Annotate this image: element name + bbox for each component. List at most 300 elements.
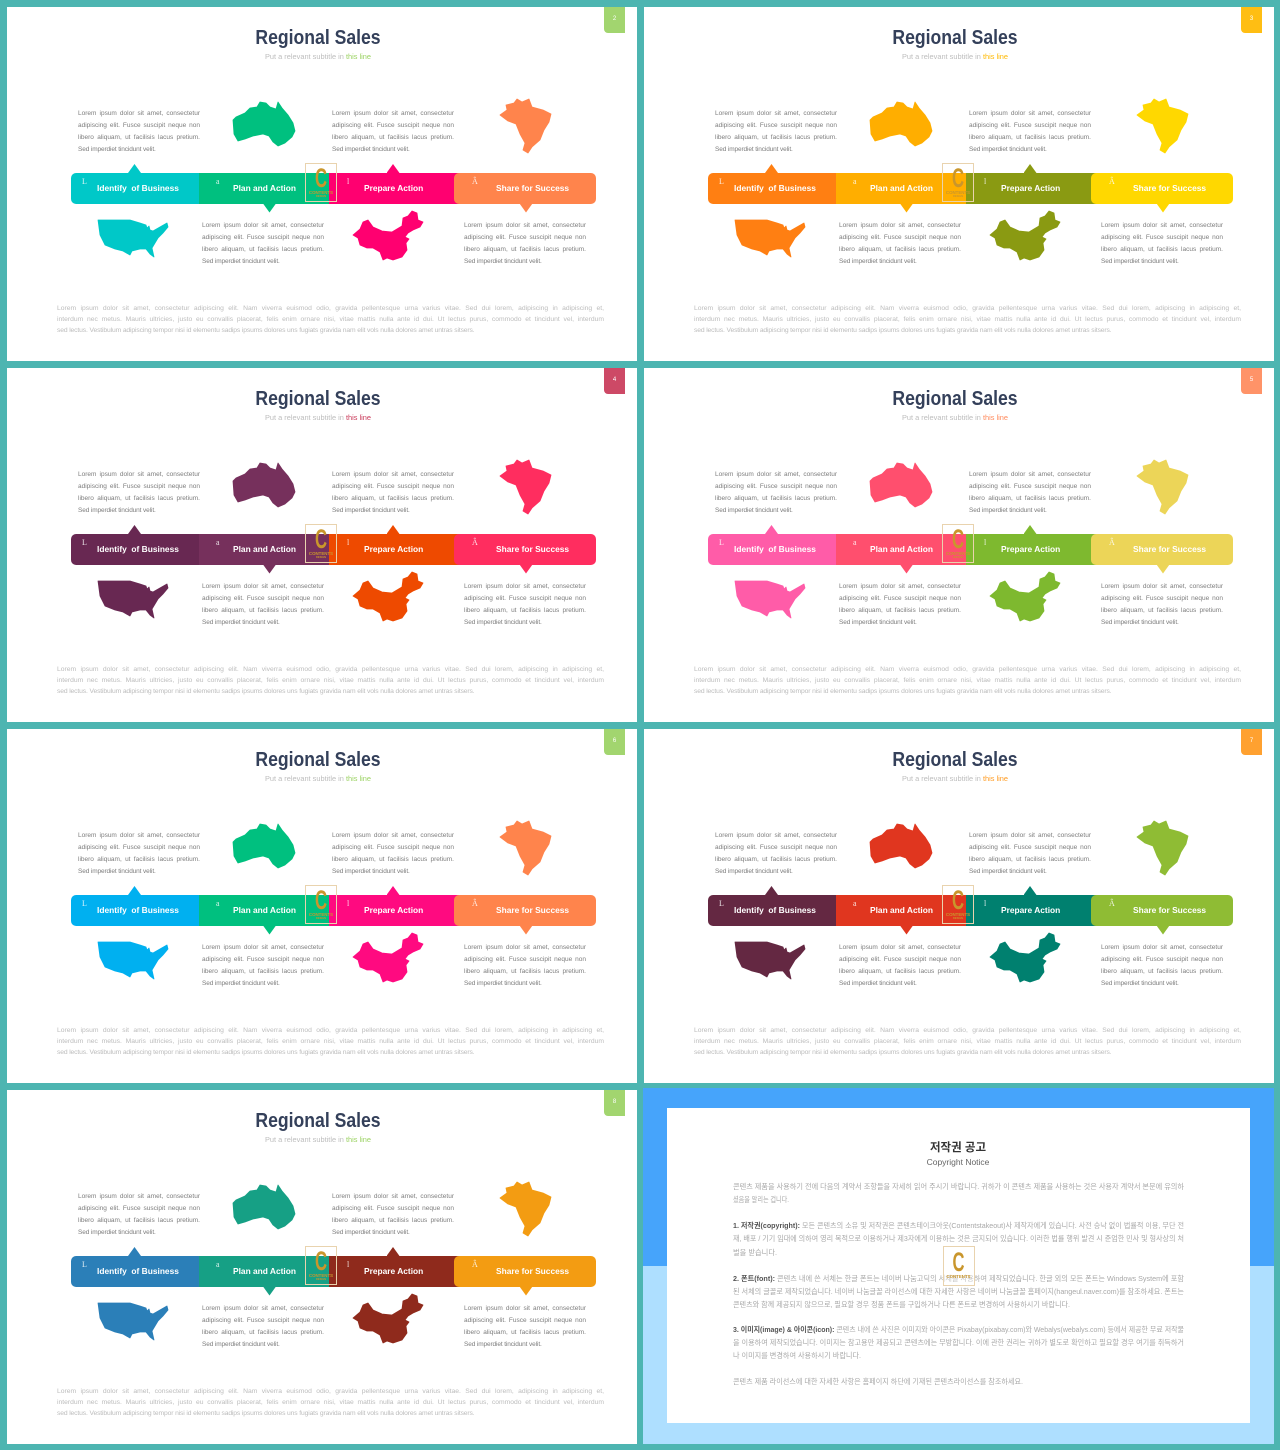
text block: top right xyxy=(969,110,1091,153)
step: Share for Success: Â xyxy=(1109,898,1115,908)
text block: bottom right: libero aliquam, ut facilisis lacus pretium. xyxy=(1101,246,1223,253)
text block: bottom left: Sed imperdiet tincidunt velit. xyxy=(202,619,280,626)
step: Plan and Action xyxy=(836,894,966,926)
text block: top left: Sed imperdiet tincidunt velit. xyxy=(715,868,793,875)
text block: top right: Lorem ipsum dolor sit amet, consectetur xyxy=(332,471,454,478)
text block: bottom left xyxy=(839,942,961,990)
text block: top right: libero aliquam, ut facilisis lacus pretium. xyxy=(969,856,1091,863)
text block: top right: libero aliquam, ut facilisis lacus pretium. xyxy=(969,495,1091,502)
step: Plan and Action: Plan and Action xyxy=(870,182,933,192)
text block: top right: adipiscing elit. Fusce suscipit neque non xyxy=(332,1205,454,1212)
logo: C xyxy=(315,163,327,193)
subtitle: Put a relevant subtitle in this line xyxy=(265,52,371,61)
icon: China map xyxy=(353,1294,423,1343)
text block: top left: Sed imperdiet tincidunt velit. xyxy=(78,1229,156,1236)
footer paragraph: Lorem ipsum dolor sit amet, consectetur adipiscing elit. Nam viverra euismod odio, gravida pellentesque urna varius vitae. Sed dui lorem, adipiscing in adipiscing et, xyxy=(57,1027,604,1034)
text block: bottom left: adipiscing elit. Fusce suscipit neque non xyxy=(202,234,324,241)
logo: CONTENTS xyxy=(309,190,333,194)
icon: Brazil map xyxy=(1136,460,1188,514)
logo: C xyxy=(952,524,964,554)
text block: top right: Lorem ipsum dolor sit amet, consectetur xyxy=(332,110,454,117)
text block: top left xyxy=(715,830,837,878)
text block: top right: Sed imperdiet tincidunt velit. xyxy=(332,507,410,514)
step: Prepare Action: l xyxy=(347,898,349,908)
footer paragraph: sed lectus. Vestibulum adipiscing tempor nisi id elementu sadips ipsums dolores uns fugiats gravida nam elit vols nulla dolores amet untras sitsers. xyxy=(57,1049,474,1056)
logo xyxy=(305,1246,337,1285)
text block: bottom right: Sed imperdiet tincidunt velit. xyxy=(1101,258,1179,265)
text block: top left xyxy=(715,110,837,153)
text block: bottom right xyxy=(464,1303,586,1351)
text block: bottom left: Lorem ipsum dolor sit amet, consectetur xyxy=(202,1305,324,1312)
text block: bottom right: Sed imperdiet tincidunt velit. xyxy=(464,980,542,987)
footer paragraph: interdum nec metus. Mauris ultricies, justo eu convallis placerat, felis enim ornare nisi, vitae mattis nulla ante id dui. Ut lectus purus, commodo et tincidunt vel, interdum xyxy=(57,677,604,684)
footer paragraph: interdum nec metus. Mauris ultricies, justo eu convallis placerat, felis enim ornare nisi, vitae mattis nulla ante id dui. Ut lectus purus, commodo et tincidunt vel, interdum xyxy=(57,1399,604,1406)
logo: DESIGN xyxy=(316,556,326,559)
step: Plan and Action: Plan and Action xyxy=(870,544,933,554)
icon: China map xyxy=(353,933,423,982)
step: Prepare Action xyxy=(329,172,459,204)
text block: top right: libero aliquam, ut facilisis lacus pretium. xyxy=(332,495,454,502)
text block: top left: libero aliquam, ut facilisis lacus pretium. xyxy=(78,1217,200,1224)
page number tab xyxy=(1241,7,1262,33)
step: Identify of Business xyxy=(71,172,199,204)
step: Identify of Business: Identify of Business xyxy=(734,544,816,554)
notice section 1 copyright: 1. 저작권(copyright): 모든 콘텐츠의 소유 및 저작권은 콘텐츠테이크아웃(Contentstakeout)사 제작자에게 있습니다. 사전 승낙 없이 법률적 이용, 무단 전 xyxy=(733,1221,1184,1230)
text block: top right: Lorem ipsum dolor sit amet, consectetur xyxy=(332,832,454,839)
text block: bottom left: Sed imperdiet tincidunt velit. xyxy=(202,258,280,265)
logo: DESIGN xyxy=(316,1278,326,1281)
step: Prepare Action xyxy=(966,894,1096,926)
step: Share for Success: Share for Success xyxy=(496,182,569,192)
text block: bottom left: libero aliquam, ut facilisis lacus pretium. xyxy=(839,968,961,975)
text block: top left: Sed imperdiet tincidunt velit. xyxy=(715,146,793,153)
step: Prepare Action: Prepare Action xyxy=(364,904,423,914)
step: Share for Success: Â xyxy=(1109,176,1115,186)
footer paragraph: Lorem ipsum dolor sit amet, consectetur adipiscing elit. Nam viverra euismod odio, gravida pellentesque urna varius vitae. Sed dui lorem, adipiscing in adipiscing et, xyxy=(57,666,604,673)
step: Prepare Action: l xyxy=(984,176,986,186)
panel: slide 5 pink coral green yellow xyxy=(644,368,1274,722)
text block: top left: Lorem ipsum dolor sit amet, consectetur xyxy=(78,471,200,478)
text block: top right: adipiscing elit. Fusce suscipit neque non xyxy=(332,844,454,851)
step: Plan and Action: Plan and Action xyxy=(233,904,296,914)
text block: bottom right: Lorem ipsum dolor sit amet, consectetur xyxy=(1101,222,1223,229)
text block: bottom right: Lorem ipsum dolor sit amet, consectetur xyxy=(464,583,586,590)
step: Share for Success: Share for Success xyxy=(1133,904,1206,914)
text block: top left: libero aliquam, ut facilisis lacus pretium. xyxy=(78,134,200,141)
text block: bottom right: Lorem ipsum dolor sit amet, consectetur xyxy=(464,944,586,951)
text block: bottom left: libero aliquam, ut facilisis lacus pretium. xyxy=(202,246,324,253)
footer paragraph: Lorem ipsum dolor sit amet, consectetur adipiscing elit. Nam viverra euismod odio, gravida pellentesque urna varius vitae. Sed dui lorem, adipiscing in adipiscing et, xyxy=(694,305,1241,312)
text block: top right: Lorem ipsum dolor sit amet, consectetur xyxy=(969,110,1091,117)
step: Plan and Action: Plan and Action xyxy=(870,904,933,914)
text block: bottom left xyxy=(202,583,324,626)
notice intro: 셨음을 알리는 겁니다. xyxy=(733,1195,789,1204)
text block: bottom left: libero aliquam, ut facilisis lacus pretium. xyxy=(839,607,961,614)
notice section 3 image and icon: 나 이미지를 변경하여 사용하시기 바랍니다. xyxy=(733,1351,861,1360)
logo: CONTENTS xyxy=(946,1274,971,1279)
text block: bottom left: Lorem ipsum dolor sit amet, consectetur xyxy=(839,583,961,590)
notice intro: 콘텐츠 제품을 사용하기 전에 다음의 계약서 조항들을 자세히 읽어 주시기 바랍니다. 귀하가 이 콘텐츠 제품을 사용하는 것은 사용자 계약서 본문에 유의하 xyxy=(733,1182,1184,1191)
footer paragraph xyxy=(694,666,1241,695)
text block: top left: libero aliquam, ut facilisis lacus pretium. xyxy=(78,856,200,863)
text block: bottom right xyxy=(1101,583,1223,626)
text block: top left: adipiscing elit. Fusce suscipit neque non xyxy=(78,1205,200,1212)
step: Share for Success: Â xyxy=(472,538,478,546)
text block: top right: libero aliquam, ut facilisis lacus pretium. xyxy=(332,1217,454,1224)
page number tab: 4 xyxy=(613,377,616,383)
subtitle: Put a relevant subtitle in this line xyxy=(902,52,1008,61)
icon: Australia map xyxy=(870,462,932,508)
step: Identify of Business xyxy=(71,534,199,565)
text block: bottom left: Lorem ipsum dolor sit amet, consectetur xyxy=(202,944,324,951)
text block: top left: adipiscing elit. Fusce suscipit neque non xyxy=(715,483,837,490)
text block: bottom right: libero aliquam, ut facilisis lacus pretium. xyxy=(464,246,586,253)
text block: top left: Lorem ipsum dolor sit amet, consectetur xyxy=(78,110,200,117)
notice section 3 image and icon xyxy=(733,1325,1184,1360)
step: Plan and Action: Plan and Action xyxy=(233,544,296,554)
text block: top left xyxy=(715,471,837,514)
icon: China map xyxy=(990,210,1060,260)
text block: top right: Lorem ipsum dolor sit amet, consectetur xyxy=(332,1193,454,1200)
page number tab xyxy=(1241,729,1262,755)
icon: USA map xyxy=(734,220,806,258)
text block: top left xyxy=(78,471,200,514)
text block: bottom right xyxy=(464,942,586,990)
logo xyxy=(305,885,337,924)
step: Identify of Business: L xyxy=(82,898,87,908)
step: Prepare Action xyxy=(329,1256,459,1287)
heading: Regional Sales xyxy=(892,749,1018,771)
step: Plan and Action xyxy=(836,534,966,565)
text block: bottom right: adipiscing elit. Fusce suscipit neque non xyxy=(464,956,586,963)
text block: top left: Lorem ipsum dolor sit amet, consectetur xyxy=(78,832,200,839)
step: Prepare Action: Prepare Action xyxy=(364,1266,423,1276)
logo: DESIGN xyxy=(953,195,963,198)
text block: top right xyxy=(332,1191,454,1239)
footer paragraph: sed lectus. Vestibulum adipiscing tempor nisi id elementu sadips ipsums dolores uns fugiats gravida nam elit vols nulla dolores amet untras sitsers. xyxy=(694,327,1112,334)
step: Plan and Action: a xyxy=(216,176,220,186)
notice section 1 copyright xyxy=(733,1221,1184,1257)
logo xyxy=(305,163,337,202)
page number tab: 6 xyxy=(613,738,616,744)
heading: Regional Sales xyxy=(255,27,381,49)
text block: bottom right: libero aliquam, ut facilisis lacus pretium. xyxy=(464,1329,586,1336)
text block: bottom right: adipiscing elit. Fusce suscipit neque non xyxy=(464,234,586,241)
footer paragraph: Lorem ipsum dolor sit amet, consectetur adipiscing elit. Nam viverra euismod odio, gravida pellentesque urna varius vitae. Sed dui lorem, adipiscing in adipiscing et, xyxy=(694,1027,1241,1034)
text block: top right: adipiscing elit. Fusce suscipit neque non xyxy=(969,122,1091,129)
text block: bottom right: Sed imperdiet tincidunt velit. xyxy=(464,619,542,626)
step: Identify of Business: L xyxy=(719,898,724,908)
step: Plan and Action xyxy=(199,534,329,565)
subtitle: Put a relevant subtitle in this line xyxy=(265,774,371,783)
icon: USA map xyxy=(98,580,168,618)
footer paragraph xyxy=(57,305,604,334)
text block: top left: adipiscing elit. Fusce suscipit neque non xyxy=(715,844,837,851)
text block: top right xyxy=(332,471,454,514)
logo: C xyxy=(952,163,964,193)
notice heading: 저작권 공고 xyxy=(930,1140,986,1154)
step: Share for Success xyxy=(1091,172,1233,204)
icon: China map xyxy=(990,572,1060,622)
text block: bottom left: Lorem ipsum dolor sit amet, consectetur xyxy=(202,583,324,590)
logo: CONTENTS xyxy=(309,550,333,556)
step: Identify of Business: Identify of Business xyxy=(97,1266,179,1276)
icon: Australia map xyxy=(232,102,296,146)
notice section 3 image and icon: 3. 이미지(image) & 아이콘(icon): 콘텐츠 내에 쓴 사진은 이미지와 아이콘은 Pixabay(pixabay.com)와 Webalys(webalys.com) 등에서 제공한 무료 저작물 xyxy=(733,1325,1184,1334)
text block: bottom left: adipiscing elit. Fusce suscipit neque non xyxy=(839,956,961,963)
notice closing line: 콘텐츠 제품 라이선스에 대한 자세한 사항은 홈페이지 하단에 기재된 콘텐츠라이선스를 참조하세요. xyxy=(733,1377,1023,1386)
step: Share for Success: Share for Success xyxy=(1133,544,1206,554)
icon: USA map xyxy=(735,941,805,979)
text block: bottom right: libero aliquam, ut facilisis lacus pretium. xyxy=(464,968,586,975)
heading: Regional Sales xyxy=(255,749,381,771)
icon: Brazil map xyxy=(500,460,552,514)
text block: bottom left: adipiscing elit. Fusce suscipit neque non xyxy=(202,595,324,602)
text block: bottom right: libero aliquam, ut facilisis lacus pretium. xyxy=(464,607,586,614)
step: Identify of Business: L xyxy=(82,176,87,186)
step: Plan and Action: Plan and Action xyxy=(233,182,296,192)
text block: bottom right: Lorem ipsum dolor sit amet, consectetur xyxy=(1101,583,1223,590)
text block: bottom left xyxy=(202,222,324,265)
subtitle: Put a relevant subtitle in this line xyxy=(265,1135,371,1144)
step: Prepare Action xyxy=(966,534,1096,565)
text block: top right xyxy=(332,830,454,878)
text block: top right: adipiscing elit. Fusce suscipit neque non xyxy=(969,483,1091,490)
text block: top left: Lorem ipsum dolor sit amet, consectetur xyxy=(715,832,837,839)
step: Share for Success: Â xyxy=(1109,538,1115,546)
text block: top left: Lorem ipsum dolor sit amet, consectetur xyxy=(78,1193,200,1200)
text block: top left: Lorem ipsum dolor sit amet, consectetur xyxy=(715,110,837,117)
panel: slide 3 orange amber olive yellow xyxy=(644,7,1274,361)
text block: bottom left: Lorem ipsum dolor sit amet, consectetur xyxy=(202,222,324,229)
footer paragraph: sed lectus. Vestibulum adipiscing tempor nisi id elementu sadips ipsums dolores uns fugiats gravida nam elit vols nulla dolores amet untras sitsers. xyxy=(57,327,474,334)
logo xyxy=(942,163,974,202)
footer paragraph: interdum nec metus. Mauris ultricies, justo eu convallis placerat, felis enim ornare nisi, vitae mattis nulla ante id dui. Ut lectus purus, commodo et tincidunt vel, interdum xyxy=(694,316,1241,323)
step: Prepare Action xyxy=(329,894,459,926)
heading: Regional Sales xyxy=(255,388,381,410)
logo xyxy=(305,524,337,563)
step: Plan and Action: a xyxy=(853,538,857,546)
step: Identify of Business: Identify of Business xyxy=(97,544,179,554)
step: Prepare Action: l xyxy=(984,538,986,546)
step: Prepare Action xyxy=(966,172,1096,204)
step: Prepare Action: Prepare Action xyxy=(1001,904,1060,914)
panel: slide 8 blue teal brown amber xyxy=(7,1090,637,1444)
text block: bottom left: Sed imperdiet tincidunt velit. xyxy=(839,619,917,626)
logo: DESIGN xyxy=(316,195,326,198)
text block: bottom right: adipiscing elit. Fusce suscipit neque non xyxy=(1101,956,1223,963)
step: Prepare Action: Prepare Action xyxy=(364,544,423,554)
text block: top left: Sed imperdiet tincidunt velit. xyxy=(715,507,793,514)
notice section 2 font: 된 서체의 글꼴로 제작되었습니다. 네이버 나눔글꼴 라이선스에 대한 자세한 사항은 네이버 나눔글꼴 홈페이지(hangeul.naver.com)를 참조하세요. 폰트는 xyxy=(733,1287,1184,1296)
text block: top right: Sed imperdiet tincidunt velit. xyxy=(969,146,1047,153)
icon: USA map xyxy=(734,580,806,618)
text block: top left: adipiscing elit. Fusce suscipit neque non xyxy=(715,122,837,129)
step: Share for Success: Share for Success xyxy=(496,544,569,554)
footer paragraph xyxy=(57,1025,604,1058)
step: Share for Success xyxy=(454,894,596,926)
panel: slide 7 maroon red teal lime xyxy=(644,729,1274,1083)
icon: China map xyxy=(990,933,1060,982)
panel: slide 2 teal green pink orange xyxy=(7,7,637,361)
logo: C xyxy=(952,1247,964,1277)
logo: CONTENTS xyxy=(946,190,970,194)
step: Plan and Action: a xyxy=(216,898,220,908)
logo: CONTENTS xyxy=(946,912,970,916)
text block: bottom right: Sed imperdiet tincidunt velit. xyxy=(464,1341,542,1348)
text block: top right xyxy=(969,830,1091,878)
step: Identify of Business xyxy=(71,1256,199,1287)
text block: top left: adipiscing elit. Fusce suscipit neque non xyxy=(78,483,200,490)
logo: CONTENTS xyxy=(946,550,970,556)
notice subheading: Copyright Notice xyxy=(927,1157,990,1167)
icon: Australia map xyxy=(870,824,932,868)
text block: top left: libero aliquam, ut facilisis lacus pretium. xyxy=(715,134,837,141)
heading: Regional Sales xyxy=(892,27,1018,49)
text block: bottom right: Sed imperdiet tincidunt velit. xyxy=(1101,619,1179,626)
step: Prepare Action: l xyxy=(347,176,349,186)
step: Identify of Business xyxy=(708,534,836,565)
step: Identify of Business xyxy=(71,894,199,926)
text block: top left xyxy=(78,1191,200,1239)
notice section 3 image and icon: 을 이용하여 제작되었습니다. 이미지는 참고용만 제공되고 콘텐츠에는 무방합니다. 이에 관한 권리는 귀하가 별도로 확인하고 필요할 경우 여기를 취득하거 xyxy=(733,1338,1184,1347)
text block: bottom left: Lorem ipsum dolor sit amet, consectetur xyxy=(839,944,961,951)
text block: bottom left: libero aliquam, ut facilisis lacus pretium. xyxy=(839,246,961,253)
text block: bottom left: libero aliquam, ut facilisis lacus pretium. xyxy=(202,968,324,975)
icon: China map xyxy=(352,210,424,260)
logo: DESIGN xyxy=(316,917,326,920)
icon: Australia map xyxy=(232,462,296,508)
text block: top right: Sed imperdiet tincidunt velit. xyxy=(332,1229,410,1236)
text block: bottom right xyxy=(464,583,586,626)
text block: bottom left: adipiscing elit. Fusce suscipit neque non xyxy=(839,595,961,602)
text block: top right xyxy=(969,471,1091,514)
notice section 2 font: 2. 폰트(font): 콘텐츠 내에 쓴 서체는 한글 폰트는 네이버 나눔고딕의 서체를 사용하여 제작되었습니다. 한글 외의 모든 폰트는 Windows System에 포함 xyxy=(733,1274,1184,1283)
page number tab xyxy=(1241,368,1262,394)
text block: top left: libero aliquam, ut facilisis lacus pretium. xyxy=(715,495,837,502)
page number tab xyxy=(604,368,625,394)
logo xyxy=(944,1246,974,1286)
logo: DESIGN xyxy=(953,917,963,920)
logo: CONTENTS xyxy=(309,912,333,916)
footer paragraph xyxy=(694,305,1241,334)
text block: bottom left: Sed imperdiet tincidunt velit. xyxy=(202,1341,280,1348)
step: Plan and Action: Plan and Action xyxy=(233,1266,296,1276)
step: Share for Success: Â xyxy=(472,176,478,186)
footer paragraph: Lorem ipsum dolor sit amet, consectetur adipiscing elit. Nam viverra euismod odio, gravida pellentesque urna varius vitae. Sed dui lorem, adipiscing in adipiscing et, xyxy=(57,1388,604,1395)
step: Share for Success: Share for Success xyxy=(496,1266,569,1276)
step: Share for Success xyxy=(454,1256,596,1287)
icon: USA map xyxy=(98,1302,168,1340)
panel: slide 4 purple and red xyxy=(7,368,637,722)
footer paragraph: interdum nec metus. Mauris ultricies, justo eu convallis placerat, felis enim ornare nisi, vitae mattis nulla ante id dui. Ut lectus purus, commodo et tincidunt vel, interdum xyxy=(694,677,1241,684)
notice section 1 copyright: 재, 배포 / 기기 임대에 의하여 영리 목적으로 이용하거나 제3자에게 이용하는 것은 금지되어 있습니다. 이러한 법률 행위 발견 시 준엄한 민사 및 형사상의 처 xyxy=(733,1234,1184,1243)
text block: top right: Lorem ipsum dolor sit amet, consectetur xyxy=(969,471,1091,478)
step: Plan and Action: a xyxy=(216,1260,220,1268)
text block: bottom left: adipiscing elit. Fusce suscipit neque non xyxy=(202,1317,324,1324)
text block: bottom right: adipiscing elit. Fusce suscipit neque non xyxy=(1101,595,1223,602)
logo: CONTENTS xyxy=(309,1272,333,1278)
heading: Regional Sales xyxy=(255,1110,381,1132)
step: Prepare Action: Prepare Action xyxy=(1001,544,1060,554)
footer paragraph: sed lectus. Vestibulum adipiscing tempor nisi id elementu sadips ipsums dolores uns fugiats gravida nam elit vols nulla dolores amet untras sitsers. xyxy=(57,1410,474,1417)
icon: USA map xyxy=(98,941,168,979)
text block: top right: Lorem ipsum dolor sit amet, consectetur xyxy=(969,832,1091,839)
text block: bottom right xyxy=(464,222,586,265)
step: Share for Success: Share for Success xyxy=(1133,182,1206,192)
icon: Brazil map xyxy=(1137,821,1189,875)
step: Prepare Action: Prepare Action xyxy=(364,182,423,192)
step: Plan and Action xyxy=(836,172,966,204)
footer paragraph: interdum nec metus. Mauris ultricies, justo eu convallis placerat, felis enim ornare nisi, vitae mattis nulla ante id dui. Ut lectus purus, commodo et tincidunt vel, interdum xyxy=(57,316,604,323)
step: Plan and Action: a xyxy=(216,538,220,546)
text block: bottom left xyxy=(839,222,961,265)
text block: top left: libero aliquam, ut facilisis lacus pretium. xyxy=(78,495,200,502)
step: Share for Success: Â xyxy=(472,1260,478,1268)
step: Prepare Action: l xyxy=(347,1260,349,1268)
step: Identify of Business xyxy=(708,894,836,926)
text block: top left xyxy=(78,110,200,153)
footer paragraph: interdum nec metus. Mauris ultricies, justo eu convallis placerat, felis enim ornare nisi, vitae mattis nulla ante id dui. Ut lectus purus, commodo et tincidunt vel, interdum xyxy=(57,1038,604,1045)
text block: bottom right: Lorem ipsum dolor sit amet, consectetur xyxy=(1101,944,1223,951)
text block: top left: Lorem ipsum dolor sit amet, consectetur xyxy=(715,471,837,478)
logo: C xyxy=(315,524,327,554)
panel: slide 6 blue green pink orange xyxy=(7,729,637,1083)
icon: Brazil map xyxy=(500,1182,552,1236)
text block: top right: Sed imperdiet tincidunt velit. xyxy=(332,146,410,153)
footer paragraph: sed lectus. Vestibulum adipiscing tempor nisi id elementu sadips ipsums dolores uns fugiats gravida nam elit vols nulla dolores amet untras sitsers. xyxy=(694,688,1112,695)
text block: bottom right: adipiscing elit. Fusce suscipit neque non xyxy=(464,1317,586,1324)
icon: USA map xyxy=(98,220,168,258)
icon: Australia map xyxy=(233,1185,295,1229)
text block: bottom right: adipiscing elit. Fusce suscipit neque non xyxy=(464,595,586,602)
subtitle: Put a relevant subtitle in this line xyxy=(902,413,1008,422)
text block: top left: libero aliquam, ut facilisis lacus pretium. xyxy=(715,856,837,863)
footer paragraph xyxy=(57,1386,604,1419)
text block: bottom left xyxy=(839,583,961,626)
notice intro xyxy=(733,1182,1184,1204)
step: Plan and Action: a xyxy=(853,898,857,908)
text block: bottom right: libero aliquam, ut facilisis lacus pretium. xyxy=(1101,968,1223,975)
step: Share for Success xyxy=(454,534,596,565)
step: Identify of Business: Identify of Business xyxy=(734,182,816,192)
text block: bottom left: libero aliquam, ut facilisis lacus pretium. xyxy=(202,607,324,614)
step: Share for Success xyxy=(1091,534,1233,565)
page number tab xyxy=(604,7,625,33)
step: Identify of Business: Identify of Business xyxy=(97,182,179,192)
text block: top left: adipiscing elit. Fusce suscipit neque non xyxy=(78,844,200,851)
footer paragraph: sed lectus. Vestibulum adipiscing tempor nisi id elementu sadips ipsums dolores uns fugiats gravida nam elit vols nulla dolores amet untras sitsers. xyxy=(694,1049,1112,1056)
step: Prepare Action: Prepare Action xyxy=(1001,182,1060,192)
footer paragraph: sed lectus. Vestibulum adipiscing tempor nisi id elementu sadips ipsums dolores uns fugiats gravida nam elit vols nulla dolores amet untras sitsers. xyxy=(57,688,474,695)
text block: bottom left xyxy=(202,942,324,990)
text block: bottom left xyxy=(202,1303,324,1351)
logo: C xyxy=(315,1246,327,1276)
step: Identify of Business: Identify of Business xyxy=(97,904,179,914)
page number tab: 8 xyxy=(613,1099,616,1105)
icon: Australia map xyxy=(233,824,295,868)
text block: top left: Sed imperdiet tincidunt velit. xyxy=(78,507,156,514)
page number tab xyxy=(604,729,625,755)
text block: bottom right: Lorem ipsum dolor sit amet, consectetur xyxy=(464,1305,586,1312)
footer paragraph: Lorem ipsum dolor sit amet, consectetur adipiscing elit. Nam viverra euismod odio, gravida pellentesque urna varius vitae. Sed dui lorem, adipiscing in adipiscing et, xyxy=(57,305,604,312)
page number tab: 2 xyxy=(613,16,616,22)
text block: bottom right: Sed imperdiet tincidunt velit. xyxy=(1101,980,1179,987)
text block: bottom right: libero aliquam, ut facilisis lacus pretium. xyxy=(1101,607,1223,614)
step: Identify of Business: L xyxy=(82,1260,87,1268)
icon: China map xyxy=(352,572,424,622)
text block: bottom right xyxy=(1101,942,1223,990)
